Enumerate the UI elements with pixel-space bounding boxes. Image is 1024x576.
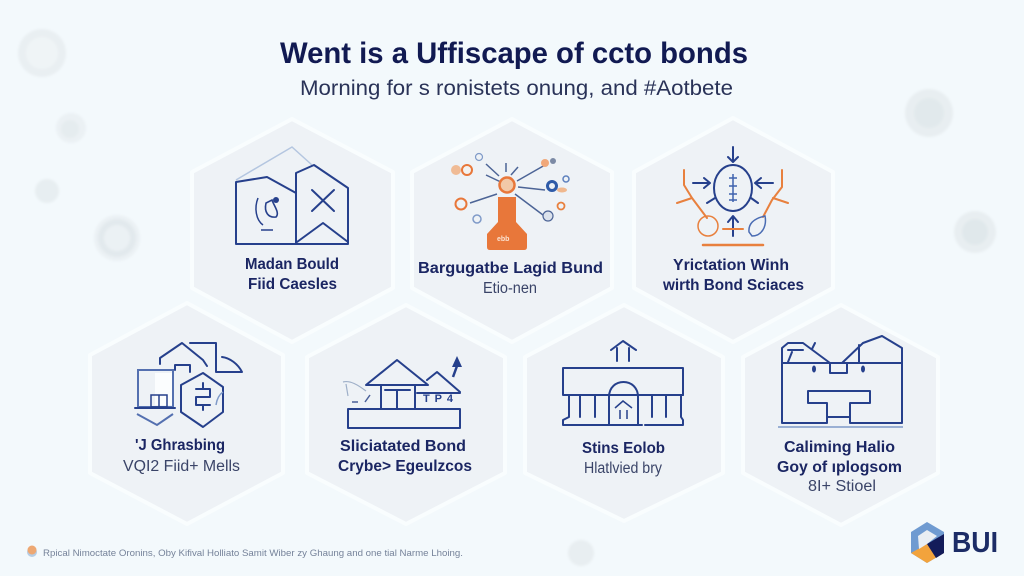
- label: Bargugatbe Lagid Bund: [418, 260, 603, 277]
- label line 2: Etio-nen: [483, 280, 537, 297]
- icon: castle outline: [778, 336, 903, 427]
- panel: Yrictation Winh: [634, 118, 833, 342]
- logo mark: [911, 522, 944, 563]
- label: Sliciatated Bond: [340, 438, 466, 455]
- subtitle: Morning for s ronistets onung, and #Aotbete: [300, 77, 733, 100]
- footer text: Rpical Nimoctate Oronins, Oby Kifival Holliato Samit Wiber zy Ghaung and one tial Narme Lhoing.: [43, 548, 463, 559]
- icon: footer mark: [27, 546, 37, 557]
- label line 2: Crybe> Egeulzcos: [338, 458, 472, 475]
- hexagon: [525, 305, 723, 521]
- label: 'J Ghrasbing: [135, 437, 225, 454]
- footer note: [27, 546, 463, 559]
- label line 2: wirth Bond Sciaces: [662, 277, 804, 294]
- label: Madan Bould: [245, 256, 339, 273]
- label: Stins Eolob: [582, 440, 665, 457]
- panel: Stins Eolob: [525, 305, 723, 521]
- hexagon: [90, 303, 283, 524]
- label line 2: Fiid Caesles: [248, 276, 337, 293]
- label: Yrictation Winh: [673, 257, 789, 274]
- icon: converging arrows: [677, 147, 788, 245]
- icon: house on platform: TP4: [423, 393, 454, 405]
- label line 3: 8I+ Stioel: [808, 478, 876, 495]
- hexagon: [634, 118, 833, 342]
- panel: Sliciatated Bond: [307, 305, 505, 524]
- logo wordmark: BUI: [952, 527, 998, 559]
- panel: Bargugatbe Lagid Bund: [412, 119, 612, 342]
- label line 2: VQI2 Fiid+ Mells: [123, 458, 240, 475]
- icon: columned building: [563, 341, 683, 425]
- label line 2: Goy of ıplogsom: [777, 459, 902, 476]
- hexagon: [743, 305, 938, 525]
- icon: twin houses: [236, 147, 348, 244]
- icon: house laptop shield: [135, 343, 242, 427]
- label: Caliming Halio: [784, 439, 895, 456]
- panel: Ghrasbing: [90, 303, 283, 524]
- label line 2: Hlatlvied bry: [584, 460, 662, 477]
- hexagon: [307, 305, 505, 524]
- hexagon: [192, 119, 393, 342]
- icon: orange bottle network: [451, 154, 569, 250]
- panel: Caliming Halio: [743, 305, 938, 525]
- icon: house on platform: [343, 356, 462, 428]
- hexagon: [412, 119, 612, 342]
- title: Went is a Uffiscape of ccto bonds: [280, 37, 748, 70]
- panel: Madan Bould: [192, 119, 393, 342]
- logo: [911, 522, 998, 563]
- icon: orange bottle network: ebb: [497, 236, 509, 243]
